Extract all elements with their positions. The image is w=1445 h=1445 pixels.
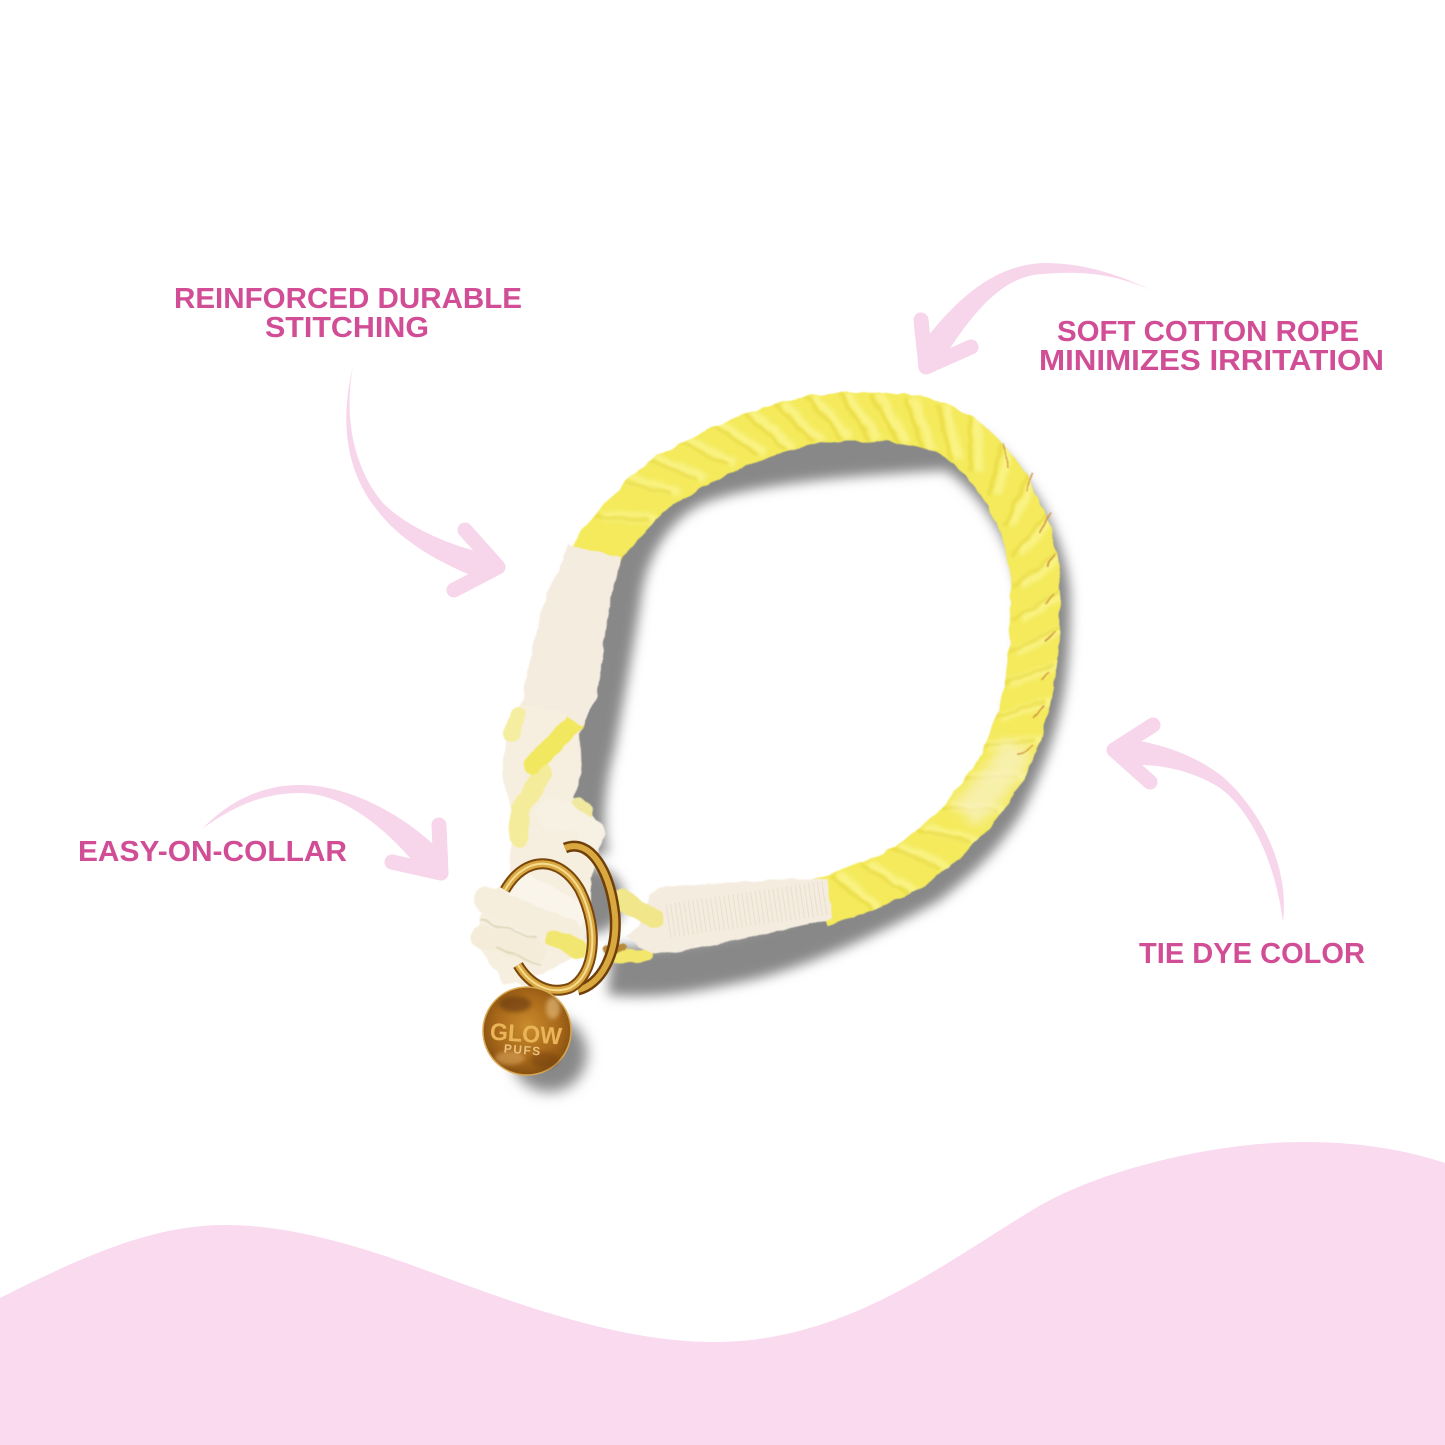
callout: reinforced durable stitching — [174, 283, 522, 344]
callout: soft cotton rope minimizes irritation: MINIMIZES IRRITATION — [1039, 345, 1384, 377]
gold tag — [483, 987, 571, 1075]
stitched white wrap lower and ring tail — [606, 878, 832, 957]
yellow rope — [590, 393, 1069, 910]
arrow: to cotton rope — [921, 263, 1157, 367]
wrap stitching texture — [668, 898, 826, 921]
knot — [482, 813, 590, 978]
callout: reinforced durable stitching: REINFORCED DURABLE — [174, 283, 522, 315]
tag text: GLOW — [489, 1019, 563, 1050]
product: rope collar — [478, 393, 1069, 1092]
rope strand twists — [593, 393, 1069, 910]
callout: easy-on-collar: EASY-ON-COLLAR — [78, 836, 347, 868]
background wave — [0, 1142, 1445, 1445]
tag subtext: PUFS — [503, 1041, 542, 1059]
collar drop shadow — [556, 445, 1045, 971]
callout: soft cotton rope minimizes irritation: SOFT COTTON ROPE — [1057, 316, 1359, 348]
rope orange fibres — [1003, 443, 1055, 755]
arrow: to stitching — [346, 366, 498, 590]
callout: soft cotton rope minimizes irritation — [1039, 316, 1384, 377]
stitched white wrap upper — [522, 545, 622, 725]
arrow: to collar ring — [202, 785, 441, 873]
callout: tie dye color: TIE DYE COLOR — [1139, 938, 1365, 970]
tag shadow — [511, 1016, 587, 1092]
braided section — [478, 700, 602, 985]
rope tie dye fade — [965, 745, 1018, 815]
callout: reinforced durable stitching: STITCHING — [265, 312, 429, 344]
arrow: to tie dye section — [1114, 725, 1284, 922]
metal rings — [505, 846, 615, 990]
